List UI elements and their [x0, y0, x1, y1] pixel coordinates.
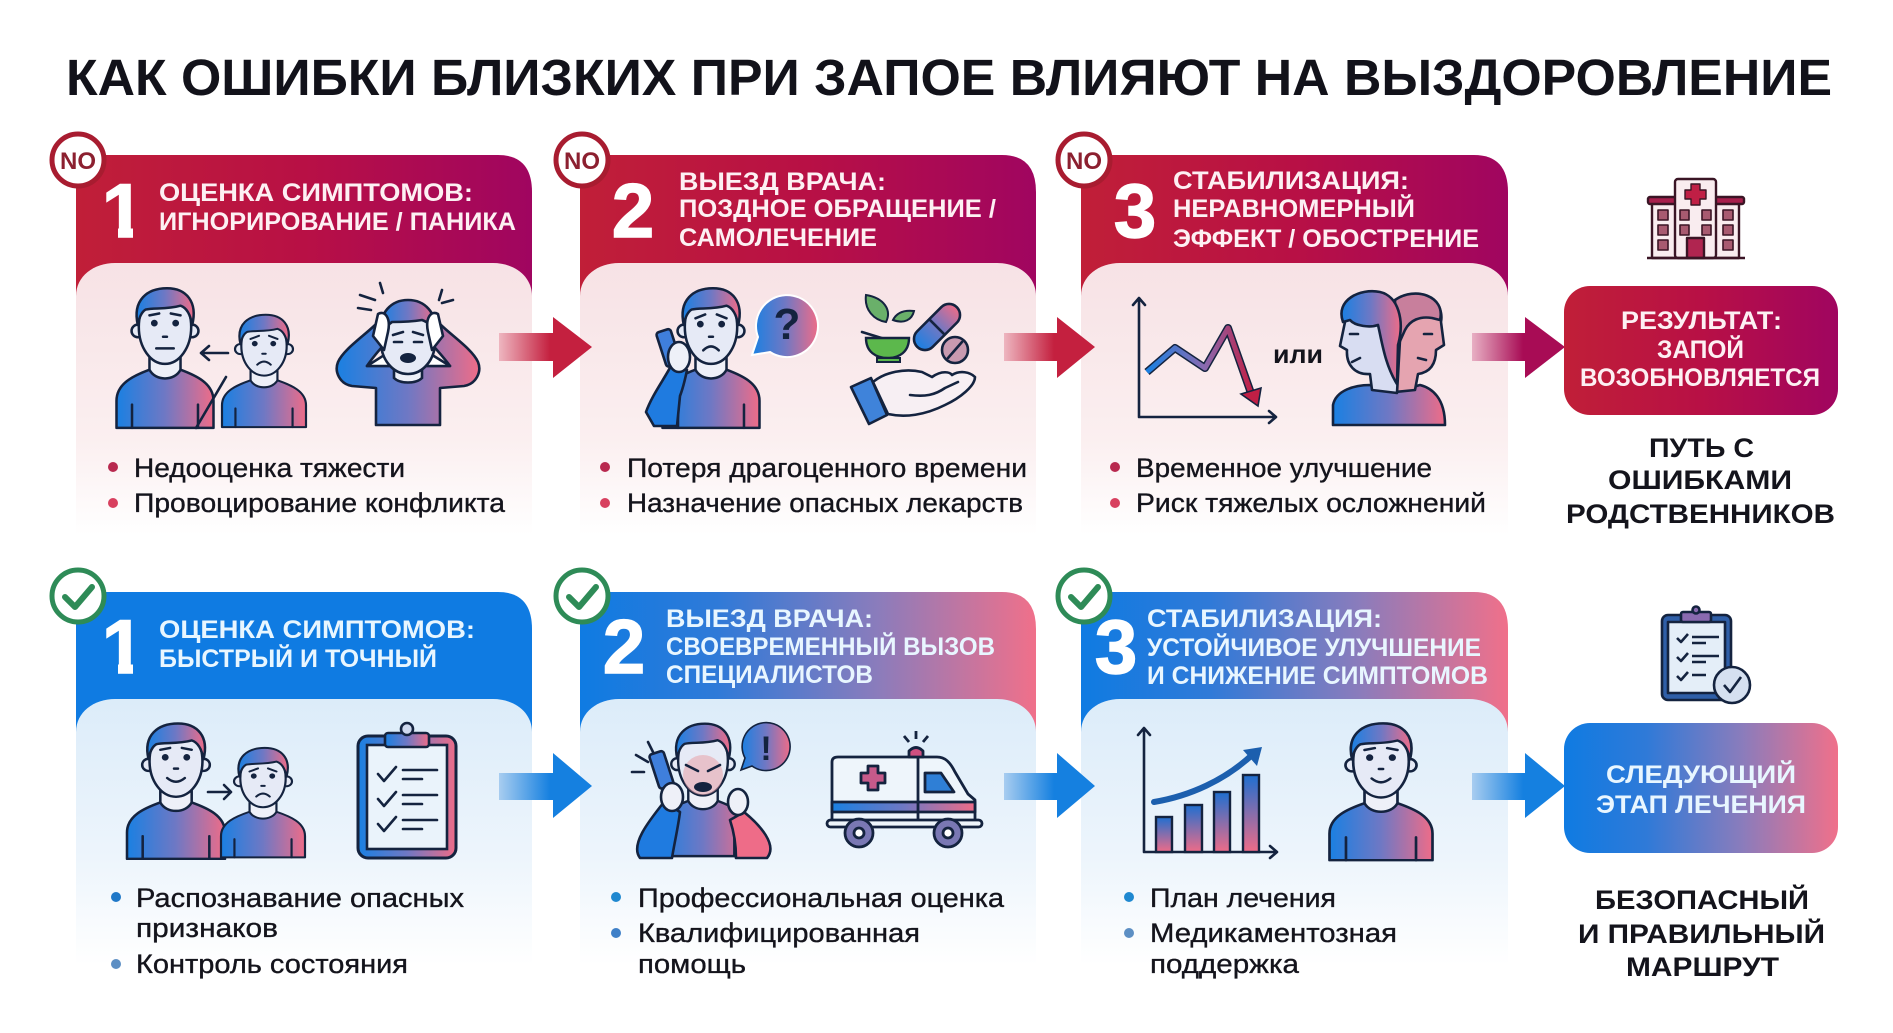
- icon: herbs mortar: [862, 295, 914, 362]
- icon: adult noticing child: [127, 723, 305, 859]
- icon: hospital: [1647, 179, 1745, 258]
- heading text: ИГНОРИРОВАНИЕ / ПАНИКА: [159, 208, 516, 236]
- label: or: или: [1273, 339, 1323, 369]
- heading text: ПОЗДНОЕ ОБРАЩЕНИЕ /: [679, 195, 996, 223]
- bullets: Назначение опасных лекарств: [627, 488, 1023, 518]
- bullets: Профессиональная оценка: [638, 883, 1004, 913]
- number 3: 3: [1095, 605, 1137, 690]
- arrow 2 wrong: [1004, 317, 1095, 378]
- panel body: [76, 699, 532, 965]
- icon: clipboard with check: [1662, 606, 1750, 703]
- icon: agitated man calling: [632, 724, 770, 858]
- result box: [1564, 286, 1838, 415]
- panel: step 3 correct: [1058, 570, 1508, 979]
- number 2: 2: [612, 169, 654, 254]
- badge: check: [1058, 570, 1110, 622]
- panel: step 2 correct: [556, 570, 1036, 979]
- number 2: 2: [603, 605, 645, 690]
- heading text: ВЫЕЗД ВРАЧА:: [666, 605, 873, 633]
- heading text: [159, 179, 516, 236]
- bullets: Квалифицированная: [638, 918, 920, 948]
- icon: question bubble: ?: [774, 300, 800, 349]
- heading text: ЭФФЕКТ / ОБОСТРЕНИЕ: [1173, 225, 1479, 253]
- panel: step 1 correct: [52, 570, 532, 979]
- bullets: [108, 453, 505, 518]
- header: step 2 wrong: [580, 155, 1036, 320]
- heading text: ВЫЕЗД ВРАЧА:: [679, 168, 886, 196]
- arrow 3 wrong: [1472, 317, 1565, 378]
- heading text: [679, 168, 996, 252]
- panel body: [76, 263, 532, 535]
- bullets: Медикаментозная: [1150, 918, 1397, 948]
- badge: check: [556, 570, 608, 622]
- icon: man calling with phone: [646, 288, 760, 428]
- icon: adult ignoring child: [116, 288, 306, 428]
- panel body: [1081, 263, 1508, 535]
- arrow 1 correct: [499, 753, 592, 818]
- heading text: СТАБИЛИЗАЦИЯ:: [1173, 167, 1409, 195]
- badge: NO: [52, 134, 104, 186]
- heading text: СВОЕВРЕМЕННЫЙ ВЫЗОВ: [666, 631, 995, 661]
- badge: NO: NO: [564, 148, 600, 175]
- next stage box: [1564, 723, 1838, 853]
- number 1: 1: [102, 169, 144, 254]
- heading text: НЕРАВНОМЕРНЫЙ: [1173, 193, 1415, 223]
- caption: wrong path: ПУТЬ С: [1649, 433, 1754, 463]
- heading text: САМОЛЕЧЕНИЕ: [679, 224, 877, 252]
- number 3: 3: [1114, 169, 1156, 254]
- caption: correct path: [1578, 884, 1825, 982]
- bullets: [111, 883, 464, 979]
- bullets: План лечения: [1150, 883, 1336, 913]
- title: КАК ОШИБКИ БЛИЗКИХ ПРИ ЗАПОЕ ВЛИЯЮТ НА ВЫЗДОРОВЛЕНИЕ: [66, 49, 1832, 106]
- badge: NO: NO: [1066, 148, 1102, 175]
- heading text: И СНИЖЕНИЕ СИМПТОМОВ: [1147, 662, 1488, 690]
- icon: pills: [909, 299, 968, 363]
- badge: NO: [1058, 134, 1110, 186]
- header: step 2 correct: [580, 592, 1036, 755]
- caption: wrong path: [1566, 433, 1835, 529]
- panel body: [580, 263, 1036, 535]
- icon: exclamation bubble: [741, 723, 790, 771]
- bullets: [611, 883, 1004, 979]
- icon: clipboard: [358, 723, 456, 858]
- panel: step 1 wrong: [52, 134, 532, 535]
- bullets: Потеря драгоценного времени: [627, 453, 1027, 483]
- panel: step 2 wrong: [556, 134, 1036, 535]
- result box: ЗАПОЙ: [1657, 334, 1744, 364]
- bullets: признаков: [136, 913, 278, 943]
- next stage box: ЭТАП ЛЕЧЕНИЯ: [1596, 791, 1806, 819]
- heading text: [1147, 605, 1488, 690]
- arrow 2 correct: [1004, 753, 1095, 818]
- heading text: СТАБИЛИЗАЦИЯ:: [1147, 605, 1382, 633]
- bullets: [1124, 883, 1397, 979]
- result box: ВОЗОБНОВЛЯЕТСЯ: [1580, 364, 1820, 392]
- panel body: [580, 699, 1036, 965]
- caption: correct path: МАРШРУТ: [1626, 952, 1780, 982]
- next stage box: СЛЕДУЮЩИЙ: [1606, 759, 1796, 789]
- arrow 3 correct: [1472, 753, 1565, 818]
- icon: open hand: [851, 370, 975, 424]
- header: step 1 correct: [76, 592, 532, 755]
- badge: check: [52, 570, 104, 622]
- icon: exclamation bubble: !: [760, 730, 772, 768]
- bullets: поддержка: [1150, 949, 1299, 979]
- panel: step 3 wrong: [1058, 134, 1508, 535]
- number 1: 1: [102, 605, 144, 690]
- bullets: Распознавание опасных: [136, 883, 464, 913]
- icon: panicking person: [337, 283, 479, 425]
- chart: uneven dynamics: [1133, 298, 1276, 423]
- header: step 3 wrong: [1081, 155, 1508, 320]
- header: step 1 wrong: [76, 155, 532, 320]
- icon: ambulance: [827, 731, 982, 847]
- arrow 1 wrong: [499, 317, 592, 378]
- heading text: ОЦЕНКА СИМПТОМОВ:: [159, 179, 473, 207]
- icon: two-faced head: [1333, 291, 1445, 425]
- result box: РЕЗУЛЬТАТ:: [1621, 307, 1782, 335]
- heading text: СПЕЦИАЛИСТОВ: [666, 661, 873, 689]
- caption: wrong path: РОДСТВЕННИКОВ: [1566, 499, 1835, 529]
- icon: happy man: [1330, 723, 1432, 860]
- bullets: Провоцирование конфликта: [134, 488, 505, 518]
- bullets: помощь: [638, 949, 746, 979]
- badge: NO: [556, 134, 608, 186]
- caption: wrong path: ОШИБКАМИ: [1608, 465, 1792, 495]
- heading text: БЫСТРЫЙ И ТОЧНЫЙ: [159, 643, 437, 673]
- bullets: Недооценка тяжести: [134, 453, 405, 483]
- bullets: Временное улучшение: [1136, 453, 1432, 483]
- chart: rising bars: [1138, 728, 1277, 858]
- heading text: [1173, 167, 1479, 253]
- bullets: [1110, 453, 1486, 518]
- caption: correct path: И ПРАВИЛЬНЫЙ: [1578, 918, 1825, 949]
- heading text: ОЦЕНКА СИМПТОМОВ:: [159, 616, 475, 644]
- bullets: Контроль состояния: [136, 949, 408, 979]
- badge: NO: NO: [60, 148, 96, 175]
- heading text: [666, 605, 995, 689]
- bullets: [600, 453, 1027, 518]
- heading text: УСТОЙЧИВОЕ УЛУЧШЕНИЕ: [1147, 632, 1481, 662]
- header: step 3 correct: [1081, 592, 1508, 755]
- caption: correct path: БЕЗОПАСНЫЙ: [1595, 884, 1809, 915]
- icon: question bubble: [752, 295, 818, 357]
- panel body: [1081, 699, 1508, 965]
- heading text: [159, 616, 475, 673]
- bullets: Риск тяжелых осложнений: [1136, 488, 1486, 518]
